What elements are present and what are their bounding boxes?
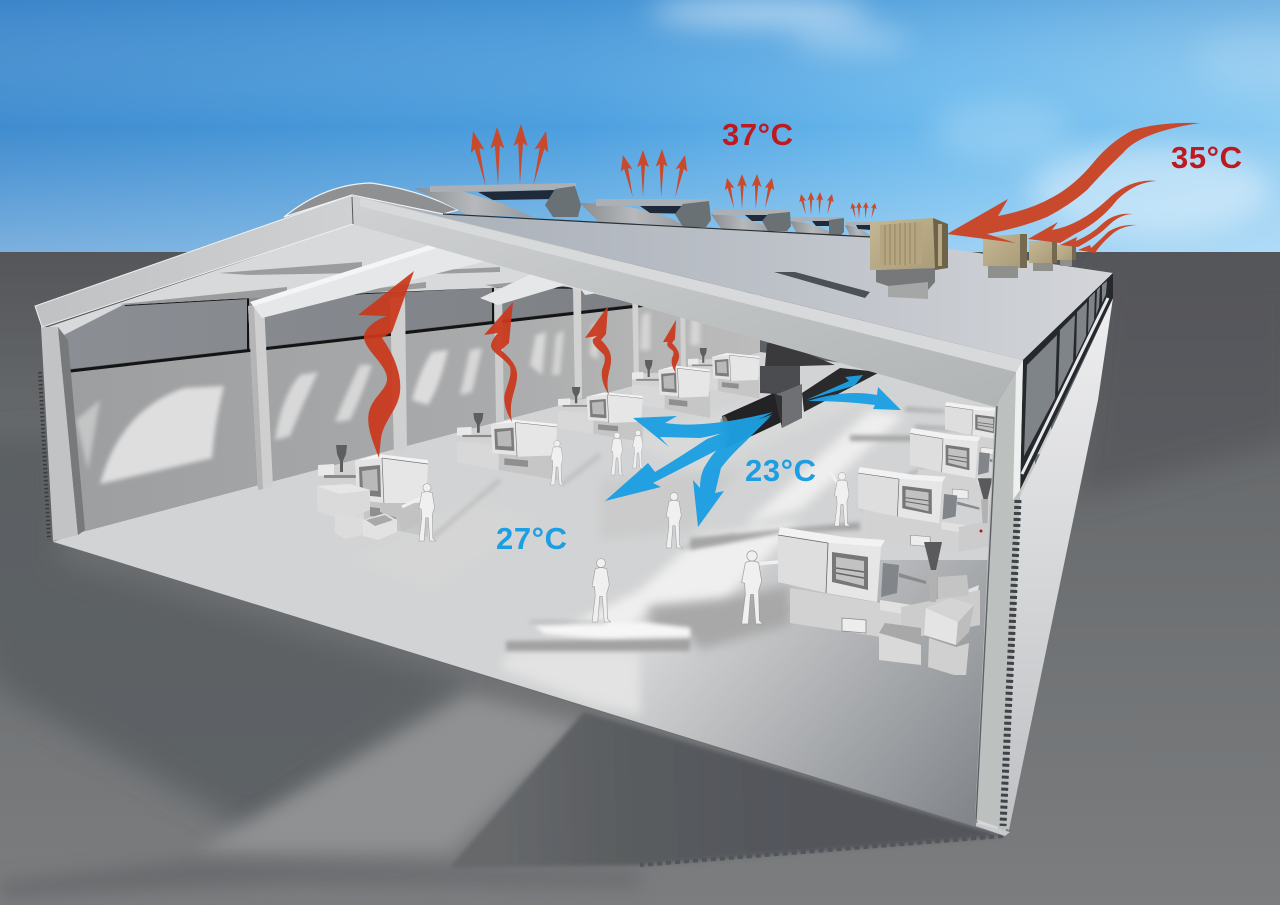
machine r4 xyxy=(945,402,1058,458)
right machines xyxy=(778,402,1058,675)
front right column xyxy=(975,360,1023,836)
arrow: left xyxy=(633,412,773,447)
roof shadow xyxy=(774,272,870,298)
people xyxy=(402,430,850,624)
rooftop cooler 3 xyxy=(1029,241,1057,271)
left front column xyxy=(40,327,85,541)
skylight 4 xyxy=(790,217,844,235)
machine 3 xyxy=(558,387,643,442)
warm air arrow 2 xyxy=(484,302,517,422)
roof surface xyxy=(352,195,1113,360)
machine 5 xyxy=(688,348,760,399)
ceiling xyxy=(48,224,660,336)
boxes near machine 1 xyxy=(317,484,420,540)
rafter xyxy=(250,245,498,318)
person 8 xyxy=(830,472,850,526)
clouds xyxy=(650,0,1280,235)
exterior side wall xyxy=(1000,273,1113,830)
person 2 xyxy=(551,440,564,485)
front gable beam: right xyxy=(352,195,1023,407)
front gable beam: left xyxy=(35,195,353,327)
machine 4 xyxy=(632,360,710,418)
roof exhaust arrows set 5 xyxy=(849,202,878,219)
building shadow on ground xyxy=(449,712,1003,868)
duct xyxy=(719,343,880,448)
wall sun patches xyxy=(76,308,700,484)
background: sky xyxy=(0,0,1280,253)
skylight 3 xyxy=(711,210,791,232)
label: 35°C: 35°C xyxy=(1171,140,1243,175)
floor xyxy=(52,352,1010,840)
arrow: down xyxy=(693,416,771,527)
lit streak on ground xyxy=(196,695,584,852)
purlins xyxy=(120,262,560,305)
warm air arrow 4 xyxy=(663,320,679,373)
box stack xyxy=(879,598,974,675)
rooftop cooler 4 xyxy=(1056,245,1076,266)
incoming hot air arrow 4 xyxy=(1078,225,1137,253)
ground xyxy=(0,252,1280,905)
person 7 xyxy=(742,551,778,624)
machine 1 xyxy=(318,445,428,537)
rooftop cooler 1 xyxy=(870,218,948,299)
people shadows xyxy=(433,454,690,626)
person 5 xyxy=(666,493,682,548)
far machines xyxy=(318,348,760,537)
back wall xyxy=(62,292,760,533)
skylight 2 xyxy=(580,199,711,227)
person 1 xyxy=(402,484,436,541)
skylights xyxy=(284,183,871,237)
person 3 xyxy=(611,432,623,475)
side windows xyxy=(1024,281,1107,456)
label: 27°C: 27°C xyxy=(496,521,568,556)
machine r1 xyxy=(778,527,980,640)
rooftop cooler 2 xyxy=(983,234,1027,278)
person 4 xyxy=(633,430,644,468)
roof exhaust arrows set 2 xyxy=(617,149,691,198)
arrow: lower left xyxy=(605,414,773,501)
warm air arrow 1 xyxy=(358,271,414,458)
machine r2 xyxy=(858,467,1024,552)
roof exhaust arrows set 1 xyxy=(466,124,553,188)
label: 37°C: 37°C xyxy=(722,117,794,152)
label: 23°C: 23°C xyxy=(745,453,817,488)
bottom shadow band xyxy=(0,860,640,898)
arrow: up right xyxy=(806,375,863,400)
incoming hot air arrow 1 xyxy=(947,123,1200,243)
machine r3 xyxy=(910,428,1043,504)
arrow: right xyxy=(808,387,901,410)
roof exhaust arrows set 3 xyxy=(722,174,777,210)
skylight 1 xyxy=(414,183,581,217)
person 6 xyxy=(592,559,611,622)
cold air arrows xyxy=(605,375,901,527)
warm air arrow 3 xyxy=(585,306,611,395)
back windows xyxy=(62,282,760,372)
incoming hot air arrow 3 xyxy=(1060,214,1133,247)
skylight 5 xyxy=(845,222,871,237)
end dome xyxy=(284,183,458,217)
columns xyxy=(248,288,686,490)
roof exhaust arrows set 4 xyxy=(798,192,835,215)
machine 2 xyxy=(457,413,557,480)
incoming hot air arrow 2 xyxy=(1028,181,1157,243)
